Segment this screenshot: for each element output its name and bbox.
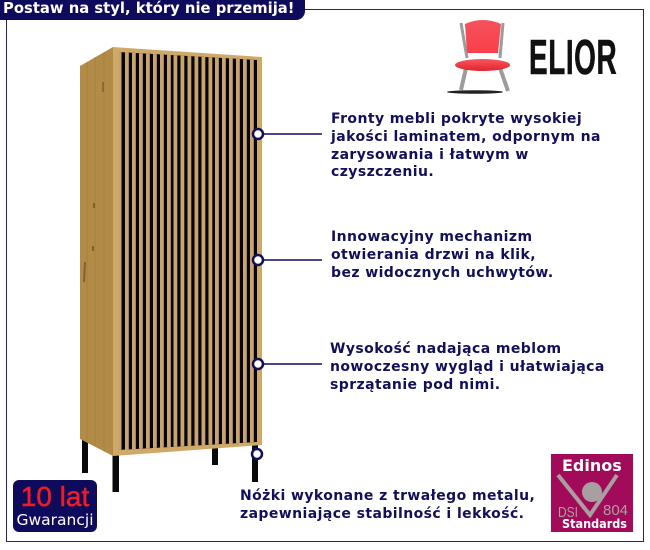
Edinos mark: Edinos	[562, 456, 622, 475]
text block: legs: zapewniające stabilność i lekkość.	[240, 506, 524, 522]
Edinos mark: 804	[603, 502, 628, 519]
text block: legs: Nóżki wykonane z trwałego metalu,	[240, 488, 535, 504]
slatted door	[118, 50, 257, 455]
callout line 3	[253, 359, 322, 369]
callout line 1	[253, 129, 322, 139]
text block: height: nowoczesny wygląd i ułatwiająca	[330, 359, 605, 375]
badge headline: 10 lat	[21, 481, 89, 512]
text block: height	[330, 341, 605, 393]
Edinos mark	[556, 456, 628, 531]
side panel	[80, 47, 113, 456]
text block: mechanism	[331, 229, 554, 281]
wardrobe illustration	[80, 20, 510, 492]
text block: fronts: czyszczeniu.	[331, 164, 434, 180]
title banner: Postaw na styl, który nie przemija!	[3, 0, 295, 17]
text block: mechanism: Innowacyjny mechanizm	[331, 229, 532, 245]
text block: legs	[240, 488, 535, 522]
callout line 2	[253, 255, 322, 265]
text block: fronts	[330, 111, 601, 180]
icon: red chair	[447, 20, 510, 94]
callout marker 4	[252, 449, 262, 459]
text block: height: Wysokość nadająca meblom	[330, 341, 562, 357]
badge: Edinos standard	[551, 454, 633, 532]
text block: height: sprzątanie pod nimi.	[330, 377, 501, 393]
badge caption: Gwarancji	[16, 511, 94, 529]
text block: fronts: zarysowania i łatwym w	[331, 147, 529, 163]
badge: 10 year warranty	[13, 480, 97, 532]
text block: fronts: jakości laminatem, odpornym na	[331, 129, 601, 145]
text block: mechanism: otwierania drzwi na klik,	[331, 247, 536, 263]
legs	[82, 440, 258, 492]
Edinos mark: Standards	[562, 517, 627, 531]
Edinos mark: DSI	[558, 504, 578, 521]
logo text: ELIOR	[529, 31, 617, 85]
front frame	[113, 47, 262, 456]
text block: fronts: Fronty mebli pokryte wysokiej	[331, 111, 582, 127]
text block: mechanism: bez widocznych uchwytów.	[331, 265, 554, 281]
